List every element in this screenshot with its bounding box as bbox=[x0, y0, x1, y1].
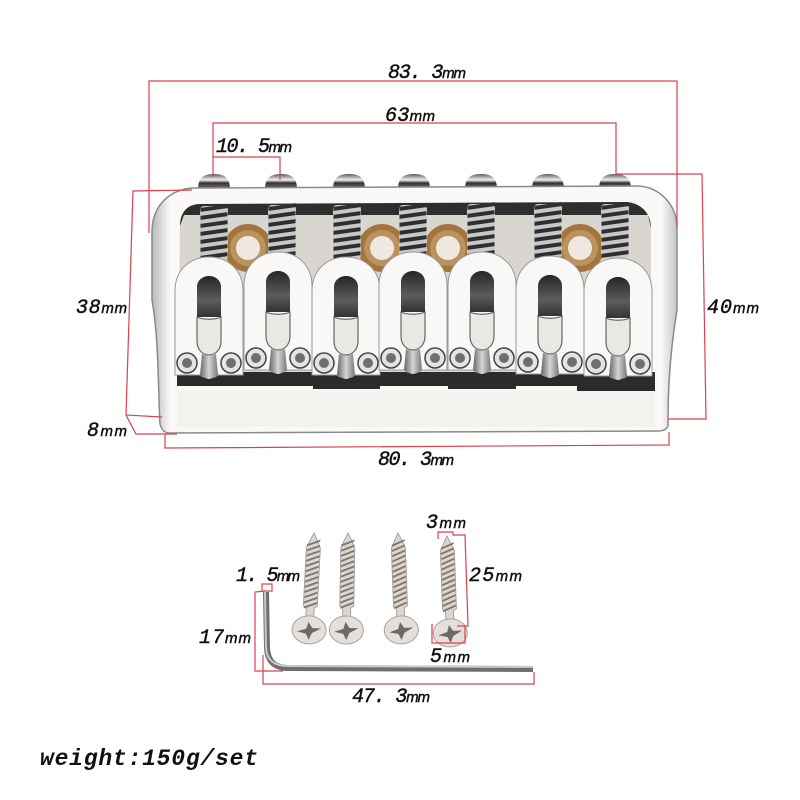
label: 38mm: 38mm bbox=[76, 297, 127, 320]
adjustment screw heads bbox=[198, 174, 631, 189]
label: 47.3mm: 47. 3mm bbox=[352, 686, 430, 709]
label: 25mm: 25mm bbox=[469, 565, 522, 588]
shadow band under saddles bbox=[177, 372, 655, 391]
saddle row bbox=[175, 252, 652, 380]
label: 10.5mm: 10. 5mm bbox=[216, 136, 292, 159]
front lip bbox=[177, 391, 655, 427]
label: 3mm: 3mm bbox=[426, 512, 466, 535]
hex key wrench bbox=[265, 592, 533, 669]
label: 80.3mm: 80. 3mm bbox=[378, 449, 454, 472]
plate window bbox=[178, 202, 651, 386]
dimension lines: hardware bbox=[255, 532, 534, 684]
label: 17mm: 17mm bbox=[199, 627, 251, 650]
springs bbox=[200, 204, 629, 260]
bridge assembly bbox=[152, 174, 677, 433]
label: 5mm: 5mm bbox=[430, 646, 470, 669]
label: 40mm: 40mm bbox=[707, 297, 759, 320]
brass ferrules bbox=[224, 224, 604, 272]
chrome base plate bbox=[152, 186, 677, 433]
label: 63mm: 63mm bbox=[385, 105, 435, 128]
label: 1.5mm: 1. 5mm bbox=[236, 565, 300, 588]
label: 8mm: 8mm bbox=[87, 420, 127, 443]
dimension lines: bridge bbox=[126, 81, 706, 448]
label: 83.3mm: 83. 3mm bbox=[388, 62, 466, 85]
wood screws bbox=[291, 532, 468, 648]
weight note: weight:150g/set bbox=[40, 746, 258, 772]
